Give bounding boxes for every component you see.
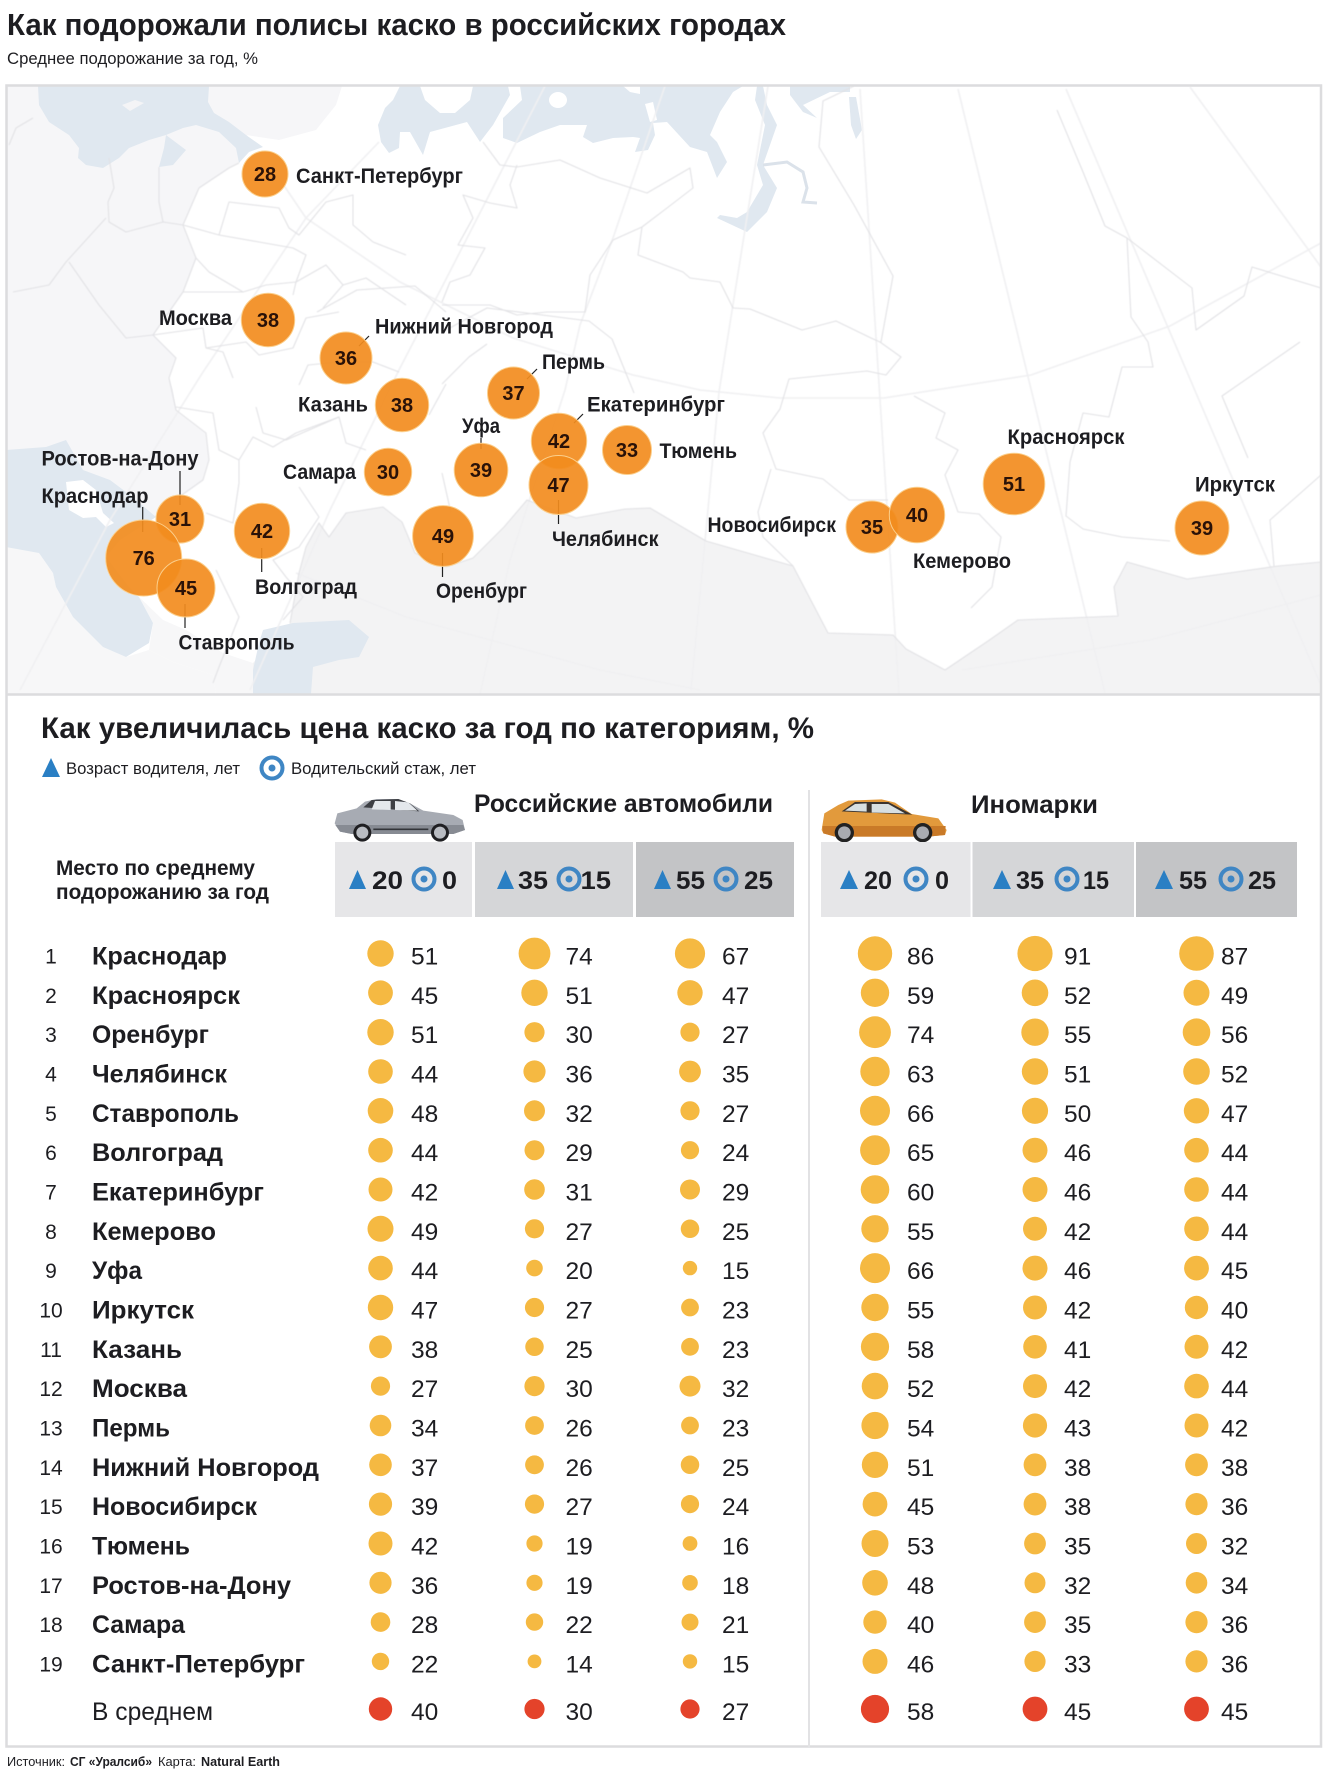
bubble: Уфа: [454, 443, 508, 497]
row 6: Волгоград: 44: [411, 1140, 438, 1167]
row 3: Оренбург: [45, 1016, 1248, 1049]
row 13: Пермь: [39, 1412, 1248, 1442]
header cell: Russian 20 / 0: 20: [372, 867, 403, 895]
row 8: Кемерово: 55: [907, 1219, 934, 1246]
header cell: foreign 55 / 25: 25: [1248, 867, 1276, 895]
row 16: Тюмень: 16: [39, 1536, 63, 1558]
row 17: Ростов-на-Дону: 32: [1064, 1573, 1091, 1600]
row 6: Волгоград: 46: [1064, 1140, 1091, 1167]
row 18: Самара: 36: [1221, 1612, 1248, 1639]
row 9: Уфа: 44: [411, 1258, 438, 1285]
bubble: Нижний Новгород: 36: [335, 348, 357, 370]
bubble: Казань: [375, 378, 429, 432]
city labels: Казань: [298, 394, 368, 416]
row 9: Уфа: 15: [722, 1258, 749, 1285]
legend: [42, 758, 476, 778]
row 1: Краснодар: 86: [907, 944, 934, 970]
bubble: Красноярск: 51: [1003, 474, 1025, 496]
row 13: Пермь: 43: [1064, 1416, 1091, 1442]
row 3: Оренбург: 74: [907, 1022, 934, 1049]
row 14: Нижний Новгород: 38: [1221, 1455, 1248, 1482]
row 19: Санкт-Петербург: 14: [566, 1651, 593, 1678]
bubble: Челябинск: 47: [547, 475, 570, 497]
row 11: Казань: [40, 1333, 1248, 1364]
bubble: Тюмень: [602, 426, 652, 474]
row 17: Ростов-на-Дону: 48: [907, 1573, 934, 1600]
bubble: Красноярск: [983, 453, 1045, 515]
row 2: Красноярск: [45, 979, 1248, 1010]
bubble: Краснодар: 76: [133, 548, 155, 570]
bubble: Москва: 38: [257, 310, 279, 332]
city labels: Ставрополь: [178, 632, 295, 654]
bubble: Кемерово: 40: [906, 505, 928, 527]
header cell: Russian 55 / 25: 55: [676, 867, 705, 895]
row 11: Казань: 11: [40, 1339, 62, 1362]
row 8: Кемерово: 8: [45, 1221, 57, 1244]
row 14: Нижний Новгород: 14: [39, 1457, 63, 1480]
row 10: Иркутск: 23: [722, 1298, 749, 1324]
row 4: Челябинск: 52: [1221, 1062, 1248, 1088]
row 1: Краснодар: 1: [45, 946, 57, 968]
city labels: Оренбург: [436, 580, 527, 603]
row 13: Пермь: 42: [1221, 1416, 1248, 1442]
row 4: Челябинск: 51: [1064, 1062, 1091, 1088]
bubble: Новосибирск: [846, 501, 898, 553]
row 5: Ставрополь: 50: [1064, 1101, 1091, 1128]
row 8: Кемерово: 49: [411, 1219, 438, 1246]
row 3: Оренбург: Оренбург: [92, 1021, 209, 1049]
row 16: Тюмень: [39, 1530, 1248, 1560]
subtitle: Среднее подорожание за год, %: [7, 49, 258, 68]
row 15: Новосибирск: Новосибирск: [92, 1493, 257, 1521]
row 17: Ростов-на-Дону: Ростов-на-Дону: [92, 1572, 291, 1600]
row 10: Иркутск: 55: [907, 1298, 934, 1324]
city labels: Пермь: [542, 351, 605, 374]
row 6: Волгоград: 44: [1221, 1140, 1248, 1167]
row 5: Ставрополь: 32: [566, 1101, 593, 1128]
bubble: Уфа: 39: [470, 460, 492, 482]
row 16: Тюмень: 35: [1064, 1534, 1091, 1560]
graticule: [20, 86, 1321, 694]
row: average: 45: [1064, 1699, 1091, 1726]
row 18: Самара: 21: [722, 1612, 749, 1639]
row 7: Екатеринбург: 46: [1064, 1180, 1091, 1206]
row 7: Екатеринбург: Екатеринбург: [92, 1178, 264, 1206]
row 9: Уфа: 66: [907, 1258, 934, 1285]
source note: СГ «Уралсиб»: [70, 1755, 152, 1769]
row 1: Краснодар: 51: [411, 944, 438, 970]
bubble: Ростов-на-Дону: 31: [169, 509, 191, 531]
legend: Возраст водителя, лет: [66, 759, 240, 778]
bubble: Иркутск: [1175, 501, 1229, 555]
row 13: Пермь: 23: [722, 1416, 749, 1442]
row 5: Ставрополь: 48: [411, 1101, 438, 1128]
city labels: Москва: [159, 307, 232, 330]
row 18: Самара: [39, 1610, 1248, 1639]
bubble: Пермь: [488, 367, 540, 419]
header cell: Russian 35 / 15: 15: [580, 867, 611, 895]
city labels: Челябинск: [552, 528, 659, 551]
row 19: Санкт-Петербург: Санкт-Петербург: [92, 1650, 305, 1678]
row 14: Нижний Новгород: 51: [907, 1455, 934, 1482]
row 11: Казань: 23: [722, 1337, 749, 1364]
row 19: Санкт-Петербург: 15: [722, 1651, 749, 1678]
row 12: Москва: Москва: [92, 1375, 188, 1403]
row 9: Уфа: [45, 1253, 1248, 1285]
map background: [6, 86, 1321, 694]
row 8: Кемерово: 44: [1221, 1219, 1248, 1246]
group heading: Российские автомобили: Российские автомобили: [474, 790, 773, 818]
row 3: Оренбург: 30: [566, 1022, 593, 1049]
row 13: Пермь: 54: [907, 1416, 934, 1442]
row: average: В среднем: [92, 1698, 213, 1726]
row 12: Москва: 44: [1221, 1376, 1248, 1403]
row 18: Самара: Самара: [92, 1611, 186, 1639]
row 2: Красноярск: Красноярск: [92, 982, 240, 1010]
row 4: Челябинск: 35: [722, 1062, 749, 1088]
city labels: Уфа: [462, 415, 500, 438]
bubble: Екатеринбург: [531, 413, 587, 469]
header cell: foreign 35 / 15: 15: [1083, 867, 1109, 895]
bubble: Кемерово: [889, 487, 945, 543]
row: average: 40: [411, 1699, 438, 1726]
row: average: 45: [1221, 1699, 1248, 1726]
city labels: Красноярск: [1008, 426, 1125, 449]
row 4: Челябинск: Челябинск: [92, 1060, 227, 1088]
city labels: Новосибирск: [708, 514, 836, 537]
row 10: Иркутск: 42: [1064, 1298, 1091, 1324]
source note: Natural Earth: [201, 1755, 280, 1769]
row 6: Волгоград: 24: [722, 1140, 749, 1167]
row 11: Казань: 42: [1221, 1337, 1248, 1364]
row 9: Уфа: 20: [566, 1258, 593, 1285]
row 15: Новосибирск: [39, 1492, 1248, 1521]
row 12: Москва: [39, 1373, 1248, 1403]
row 18: Самара: 22: [566, 1612, 593, 1639]
row 5: Ставрополь: 27: [722, 1101, 749, 1128]
bubble: Нижний Новгород: [320, 332, 372, 384]
city labels: Екатеринбург: [587, 394, 725, 416]
row 1: Краснодар: 87: [1221, 944, 1248, 970]
row 19: Санкт-Петербург: 36: [1221, 1651, 1248, 1678]
row 4: Челябинск: 4: [45, 1064, 57, 1086]
bubble: Самара: [364, 448, 412, 496]
row 5: Ставрополь: Ставрополь: [92, 1100, 239, 1128]
row 12: Москва: 12: [39, 1378, 63, 1401]
row 10: Иркутск: 40: [1221, 1298, 1248, 1324]
row 15: Новосибирск: 15: [39, 1496, 63, 1519]
row 14: Нижний Новгород: 26: [566, 1455, 593, 1482]
city labels: Ростов-на-Дону: [42, 448, 199, 470]
row 14: Нижний Новгород: 38: [1064, 1455, 1091, 1482]
bubble: Оренбург: 49: [432, 526, 454, 548]
row 3: Оренбург: 51: [411, 1022, 438, 1049]
city labels: Иркутск: [1195, 474, 1275, 496]
row 19: Санкт-Петербург: 33: [1064, 1651, 1091, 1678]
row 3: Оренбург: 3: [45, 1024, 57, 1047]
row 14: Нижний Новгород: [39, 1452, 1248, 1482]
leader lines: [143, 336, 583, 628]
row 5: Ставрополь: 47: [1221, 1101, 1248, 1128]
bubble: Санкт-Петербург: 28: [254, 164, 276, 186]
row 5: Ставрополь: [45, 1096, 1248, 1128]
row 10: Иркутск: Иркутск: [92, 1296, 195, 1324]
row 14: Нижний Новгород: 37: [411, 1455, 438, 1482]
row 13: Пермь: 34: [411, 1416, 438, 1442]
row 18: Самара: 28: [411, 1612, 438, 1639]
row 19: Санкт-Петербург: 19: [39, 1653, 63, 1676]
row 18: Самара: 35: [1064, 1612, 1091, 1639]
header cell: Russian 55 / 25: [636, 842, 794, 917]
section heading: Как увеличилась цена каско за год по категориям, %: [41, 712, 814, 745]
row 10: Иркутск: [39, 1294, 1248, 1324]
row: average: 27: [722, 1699, 749, 1726]
bubble: Оренбург: [413, 506, 473, 566]
row 17: Ростов-на-Дону: [39, 1570, 1248, 1600]
header cell: foreign 20 / 0: 0: [935, 867, 949, 895]
bubble: Ростов-на-Дону: [156, 495, 204, 543]
row 12: Москва: 42: [1064, 1376, 1091, 1403]
row 15: Новосибирск: 38: [1064, 1494, 1091, 1521]
bubble: Ставрополь: [157, 559, 215, 617]
source note: [7, 1755, 280, 1769]
row 2: Красноярск: 59: [907, 983, 934, 1010]
icon: orange car: [822, 799, 947, 842]
row 6: Волгоград: 65: [907, 1140, 934, 1167]
header cell: foreign 35 / 15: 35: [1016, 867, 1044, 895]
row 1: Краснодар: 91: [1064, 944, 1091, 970]
rank column heading: Место по среднему: [56, 857, 255, 880]
row 5: Ставрополь: 5: [45, 1103, 57, 1126]
bubble: Ставрополь: 45: [175, 578, 197, 600]
row 6: Волгоград: 6: [45, 1142, 57, 1165]
header cell: Russian 20 / 0: [335, 842, 472, 917]
bubble: Иркутск: 39: [1191, 518, 1213, 540]
row 12: Москва: 32: [722, 1376, 749, 1403]
bubble: Казань: 38: [391, 395, 413, 417]
row 5: Ставрополь: 66: [907, 1101, 934, 1128]
row 8: Кемерово: 42: [1064, 1219, 1091, 1246]
row: average: [92, 1695, 1248, 1726]
row 1: Краснодар: 74: [566, 944, 593, 970]
row 18: Самара: 40: [907, 1612, 934, 1639]
row 8: Кемерово: [45, 1215, 1248, 1246]
header cell: Russian 55 / 25: 25: [744, 867, 773, 895]
row 14: Нижний Новгород: Нижний Новгород: [92, 1454, 319, 1482]
row 4: Челябинск: 63: [907, 1062, 934, 1088]
row 17: Ростов-на-Дону: 18: [722, 1573, 749, 1600]
row 9: Уфа: Уфа: [92, 1257, 143, 1285]
row 1: Краснодар: Краснодар: [92, 942, 227, 970]
rank column heading: [56, 857, 269, 904]
city labels: Кемерово: [913, 550, 1011, 573]
header cell: foreign 20 / 0: 20: [864, 867, 892, 895]
row 7: Екатеринбург: 31: [566, 1180, 593, 1206]
city labels: Санкт-Петербург: [296, 165, 463, 188]
row 6: Волгоград: Волгоград: [92, 1139, 223, 1167]
row 8: Кемерово: 25: [722, 1219, 749, 1246]
row 15: Новосибирск: 24: [722, 1494, 749, 1521]
row 16: Тюмень: 42: [411, 1534, 438, 1560]
city labels: Краснодар: [42, 485, 148, 508]
row 16: Тюмень: 16: [722, 1534, 749, 1560]
bubble: Волгоград: [234, 503, 290, 559]
row 11: Казань: Казань: [92, 1336, 182, 1364]
row 3: Оренбург: 27: [722, 1022, 749, 1049]
row 4: Челябинск: 44: [411, 1062, 438, 1088]
row 19: Санкт-Петербург: 46: [907, 1651, 934, 1678]
row 11: Казань: 38: [411, 1337, 438, 1364]
header cell: foreign 55 / 25: 55: [1179, 867, 1207, 895]
row 17: Ростов-на-Дону: 17: [39, 1575, 63, 1598]
row 7: Екатеринбург: 42: [411, 1180, 438, 1206]
row 7: Екатеринбург: 7: [45, 1182, 57, 1204]
source note: Источник:: [7, 1755, 65, 1769]
header cell: Russian 35 / 15: 35: [518, 867, 548, 895]
row 6: Волгоград: [45, 1135, 1248, 1167]
row 9: Уфа: 46: [1064, 1258, 1091, 1285]
row 15: Новосибирск: 45: [907, 1494, 934, 1521]
row 6: Волгоград: 29: [566, 1140, 593, 1167]
row 7: Екатеринбург: 60: [907, 1180, 934, 1206]
row 16: Тюмень: Тюмень: [92, 1532, 190, 1560]
row 19: Санкт-Петербург: 22: [411, 1651, 438, 1678]
row 2: Красноярск: 47: [722, 983, 749, 1010]
legend: Водительский стаж, лет: [291, 759, 476, 778]
icon: silver car: [335, 799, 465, 842]
header cell: foreign 20 / 0: [821, 842, 970, 917]
row 12: Москва: 52: [907, 1376, 934, 1403]
row 4: Челябинск: [45, 1057, 1248, 1088]
panel: map: [6, 86, 1321, 694]
row 15: Новосибирск: 36: [1221, 1494, 1248, 1521]
row: average: 58: [907, 1699, 934, 1726]
row 11: Казань: 41: [1064, 1337, 1091, 1364]
row 15: Новосибирск: 27: [566, 1494, 593, 1521]
row 2: Красноярск: 52: [1064, 983, 1091, 1010]
row 10: Иркутск: 47: [411, 1298, 438, 1324]
row 4: Челябинск: 36: [566, 1062, 593, 1088]
row 16: Тюмень: 19: [566, 1534, 593, 1560]
row 7: Екатеринбург: [45, 1175, 1248, 1206]
bubble: Санкт-Петербург: [242, 151, 288, 197]
group heading: Иномарки: Иномарки: [971, 791, 1098, 819]
row 19: Санкт-Петербург: [39, 1649, 1248, 1678]
row 7: Екатеринбург: 29: [722, 1180, 749, 1206]
header cell: foreign 35 / 15: [972, 842, 1134, 917]
header cell: foreign 55 / 25: [1136, 842, 1297, 917]
row 11: Казань: 58: [907, 1337, 934, 1364]
header cell: Russian 20 / 0: 0: [442, 867, 457, 895]
city labels: Самара: [283, 461, 356, 484]
source note: Карта:: [158, 1755, 196, 1769]
row 2: Красноярск: 49: [1221, 983, 1248, 1010]
bubble: Екатеринбург: 42: [548, 431, 570, 453]
row: average: 30: [566, 1699, 593, 1726]
bubble: Тюмень: 33: [616, 440, 638, 462]
row 7: Екатеринбург: 44: [1221, 1180, 1248, 1206]
row 16: Тюмень: 53: [907, 1534, 934, 1560]
city labels: [42, 165, 1275, 654]
row 8: Кемерово: 27: [566, 1219, 593, 1246]
seas and lakes: [6, 86, 862, 694]
row 14: Нижний Новгород: 25: [722, 1455, 749, 1482]
row 8: Кемерово: Кемерово: [92, 1218, 216, 1246]
city labels: Волгоград: [255, 576, 357, 599]
row 2: Красноярск: 2: [45, 985, 57, 1008]
row 9: Уфа: 45: [1221, 1258, 1248, 1285]
region borders: [9, 86, 1321, 683]
rank column heading: подорожанию за год: [56, 881, 269, 904]
row 18: Самара: 18: [39, 1614, 63, 1637]
row 17: Ростов-на-Дону: 34: [1221, 1573, 1248, 1600]
bubble: Новосибирск: 35: [861, 517, 883, 539]
bubble: Самара: 30: [377, 462, 399, 484]
row 3: Оренбург: 56: [1221, 1022, 1248, 1049]
bubble: Волгоград: 42: [251, 521, 273, 543]
row 2: Красноярск: 45: [411, 983, 438, 1010]
bubble: Пермь: 37: [502, 383, 525, 405]
row 17: Ростов-на-Дону: 19: [566, 1573, 593, 1600]
row 2: Красноярск: 51: [566, 983, 593, 1010]
city labels: Нижний Новгород: [375, 316, 553, 338]
row 12: Москва: 30: [566, 1376, 593, 1403]
row 1: Краснодар: 67: [722, 944, 749, 970]
row 13: Пермь: Пермь: [92, 1414, 170, 1442]
header cell: Russian 35 / 15: [475, 842, 633, 917]
row 12: Москва: 27: [411, 1376, 438, 1403]
row 3: Оренбург: 55: [1064, 1022, 1091, 1049]
city labels: Тюмень: [660, 440, 737, 463]
row 11: Казань: 25: [566, 1337, 593, 1364]
bubble: Челябинск: [529, 456, 588, 514]
row 1: Краснодар: [45, 936, 1248, 971]
row 13: Пермь: 26: [566, 1416, 593, 1442]
title: Как подорожали полисы каско в российских городах: [7, 7, 787, 42]
bubble: Москва: [241, 293, 295, 347]
row 9: Уфа: 9: [45, 1260, 57, 1283]
row 10: Иркутск: 10: [39, 1300, 63, 1322]
row 10: Иркутск: 27: [566, 1298, 593, 1324]
row 16: Тюмень: 32: [1221, 1534, 1248, 1560]
bubble: Краснодар: [106, 520, 182, 596]
row 17: Ростов-на-Дону: 36: [411, 1573, 438, 1600]
row 15: Новосибирск: 39: [411, 1494, 438, 1521]
row 13: Пермь: 13: [39, 1418, 63, 1440]
